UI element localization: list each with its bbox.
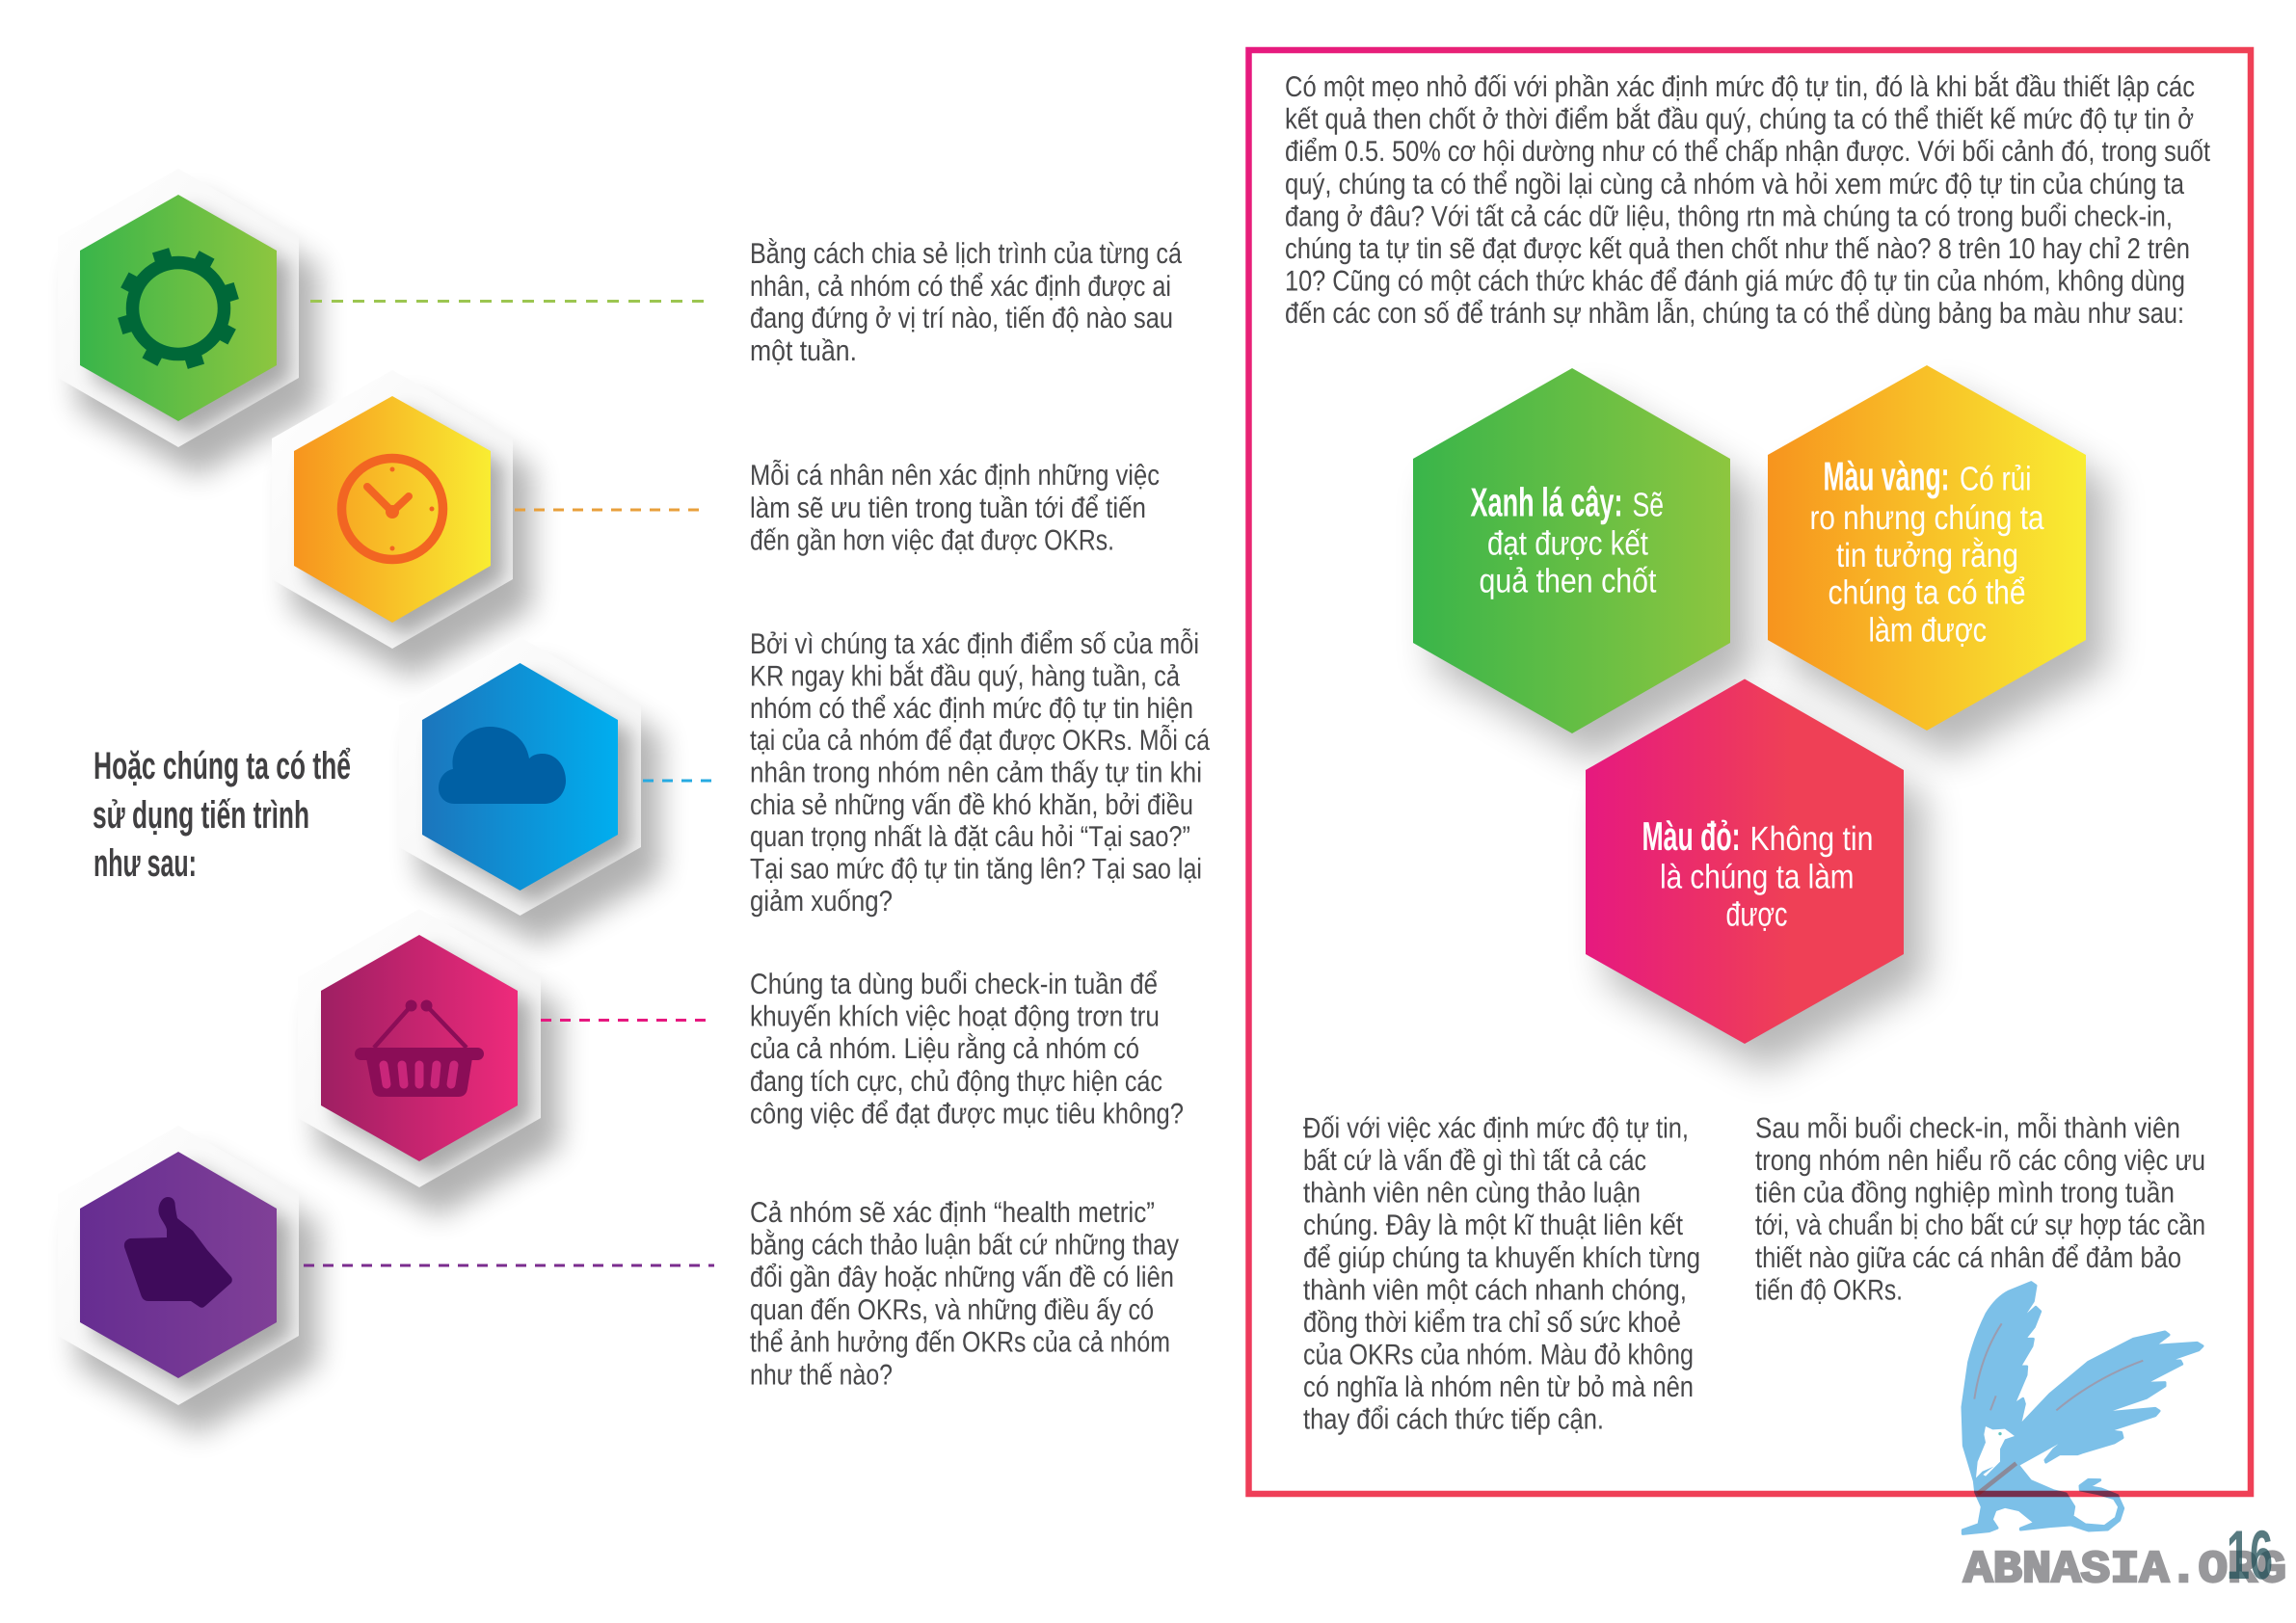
hexagon: yellow status [1768,365,2107,758]
icon: basket [355,1000,484,1097]
hexagon: orange clock [272,370,532,678]
text block: check-in encouragement: khuyến khích việc hoạt động trơn tru [750,1000,1160,1033]
text block: red does not mean give up [1303,1112,1700,1436]
text block: red does not mean give up: chúng. Đây là một kĩ thuật liên kết [1303,1210,1684,1241]
text block: red does not mean give up: thay đổi cách thức tiếp cận. [1303,1403,1604,1436]
text block: confidence score: tại của cả nhóm để đạt được OKRs. Mỗi cá [750,725,1210,757]
label: yellow meaning: làm được [1868,611,1987,650]
connector: purple dashed line [304,1264,714,1266]
label: green meaning: Sẽ [1633,486,1664,524]
label: red meaning: Màu đỏ: [1642,813,1741,859]
text block: health metric: như thế nào? [750,1359,893,1392]
text block: confidence score: Bởi vì chúng ta xác định điểm số của mỗi [750,628,1199,660]
text block: weekly priorities: làm sẽ ưu tiên trong tuần tới để tiến [750,492,1146,524]
text block: weekly priorities [750,460,1160,557]
hexagon: blue cloud [399,637,660,945]
label: green meaning: đạt được kết [1487,524,1648,563]
text block: weekly priorities: đến gần hơn việc đạt được OKRs. [750,524,1114,557]
text block: after each check-in: tiên của đồng nghiệp mình trong tuần [1755,1178,2175,1209]
hexagon: red status [1586,678,1925,1071]
text block: confidence score: KR ngay khi bắt đầu quý, hàng tuần, cả [750,659,1180,692]
text block: health metric: quan đến OKRs, và những điều ấy có [750,1294,1154,1326]
heading: process intro: sử dụng tiến trình [93,794,309,837]
label: green meaning [1471,480,1664,599]
text block: red does not mean give up: thành viên nên cùng thảo luận [1303,1178,1641,1209]
label: red meaning: là chúng ta làm [1660,858,1855,896]
text block: schedule sharing: một tuần. [750,335,857,367]
heading: process intro: như sau: [93,842,197,885]
watermark: site name: ABNASIA.ORG [1963,1545,2286,1596]
text block: confidence score [750,628,1210,918]
connector: orange dashed line [515,509,704,511]
text block: confidence intro [1285,70,2211,330]
text block: check-in encouragement: đang tích cực, chủ động thực hiện các [750,1066,1162,1098]
label: yellow meaning: chúng ta có thể [1828,574,2026,611]
text block: schedule sharing [750,237,1182,367]
text block: after each check-in: trong nhóm nên hiểu rõ các công việc ưu [1755,1145,2205,1177]
text block: health metric: bằng cách thảo luận bất cứ những thay [750,1228,1179,1261]
panel border [1249,50,2251,1494]
hexagon: green gear [58,169,318,476]
text block: after each check-in: thiết nào giữa các cá nhân để đảm bảo [1755,1242,2181,1274]
text block: after each check-in: Sau mỗi buổi check-in, mỗi thành viên [1755,1112,2180,1145]
text block: check-in encouragement: công việc để đạt được mục tiêu không? [750,1099,1184,1130]
text block: red does not mean give up: có nghĩa là nhóm nên từ bỏ mà nên [1303,1371,1694,1403]
text block: check-in encouragement: của cả nhóm. Liệu rằng cả nhóm có [750,1032,1139,1065]
icon: cloud [439,727,566,804]
label: red meaning: Không tin [1750,820,1874,858]
heading: process intro [93,745,351,885]
text block: red does not mean give up: bất cứ là vấn đề gì thì tất cả các [1303,1145,1646,1177]
text block: red does not mean give up: của OKRs của nhóm. Màu đỏ không [1303,1340,1694,1370]
panel: confidence tip [1249,50,2251,1494]
hexagon: green status [1413,368,1751,760]
hexagon: pink basket [298,909,560,1216]
label: green meaning: quả then chốt [1479,563,1657,599]
label: yellow meaning: Màu vàng: [1824,453,1949,499]
heading: process intro: Hoặc chúng ta có thể [93,745,351,787]
text block: schedule sharing: Bằng cách chia sẻ lịch trình của từng cá [750,237,1182,270]
text block: health metric [750,1197,1179,1392]
text block: schedule sharing: đang đứng ở vị trí nào, tiến độ nào sau [750,303,1173,334]
label: yellow meaning: ro nhưng chúng ta [1810,499,2044,537]
icon: gear [118,248,239,369]
text block: confidence intro: đang ở đâu? Với tất cả các dữ liệu, thông rtn mà chúng ta có trong buổi check-in, [1285,200,2173,233]
watermark: griffin logo [1962,1283,2203,1533]
text block: health metric: thể ảnh hưởng đến OKRs của cả nhóm [750,1326,1170,1359]
text block: after each check-in [1755,1112,2205,1307]
text block: red does not mean give up: để giúp chúng ta khuyến khích từng [1303,1242,1700,1274]
connector: blue dashed line [643,779,714,783]
text block: confidence score: nhóm có thể xác định mức độ tự tin hiện [750,693,1193,725]
text block: confidence score: Tại sao mức độ tự tin tăng lên? Tại sao lại [750,854,1202,885]
text block: after each check-in: tới, và chuẩn bị cho bất cứ sự hợp tác cần [1755,1210,2205,1241]
hexagon: purple thumbs up [58,1126,318,1434]
text block: check-in encouragement [750,969,1184,1130]
text block: confidence score: quan trọng nhất là đặt câu hỏi “Tại sao?” [750,821,1190,853]
label: red meaning: được [1725,896,1787,933]
text block: health metric: Cả nhóm sẽ xác định “health metric” [750,1197,1155,1229]
text block: weekly priorities: Mỗi cá nhân nên xác định những việc [750,460,1160,492]
label: yellow meaning: Có rủi [1960,461,2032,497]
text block: health metric: đổi gần đây hoặc những vấn đề có liên [750,1262,1174,1293]
label: red meaning [1642,813,1874,933]
label: yellow meaning [1810,453,2044,650]
text block: confidence score: nhân trong nhóm nên cảm thấy tự tin khi [750,758,1202,788]
text block: after each check-in: tiến độ OKRs. [1755,1274,1903,1307]
text block: red does not mean give up: thành viên một cách nhanh chóng, [1303,1274,1687,1307]
text block: confidence score: giảm xuống? [750,886,893,918]
text block: red does not mean give up: đồng thời kiểm tra chỉ số sức khoẻ [1303,1307,1681,1339]
text block: schedule sharing: nhân, cả nhóm có thể xác định được ai [750,271,1171,303]
text block: check-in encouragement: Chúng ta dùng buổi check-in tuần để [750,969,1158,1000]
text block: red does not mean give up: Đối với việc xác định mức độ tự tin, [1303,1112,1689,1145]
connector: pink dashed line [541,1019,714,1022]
icon: thumbs up [124,1197,232,1308]
label: green meaning: Xanh lá cây: [1471,480,1623,524]
connector: green dashed line [310,300,704,303]
text block: confidence score: chia sẻ những vấn đề khó khăn, bởi điều [750,789,1193,821]
icon: clock [341,459,443,559]
label: yellow meaning: tin tưởng rằng [1836,537,2018,574]
